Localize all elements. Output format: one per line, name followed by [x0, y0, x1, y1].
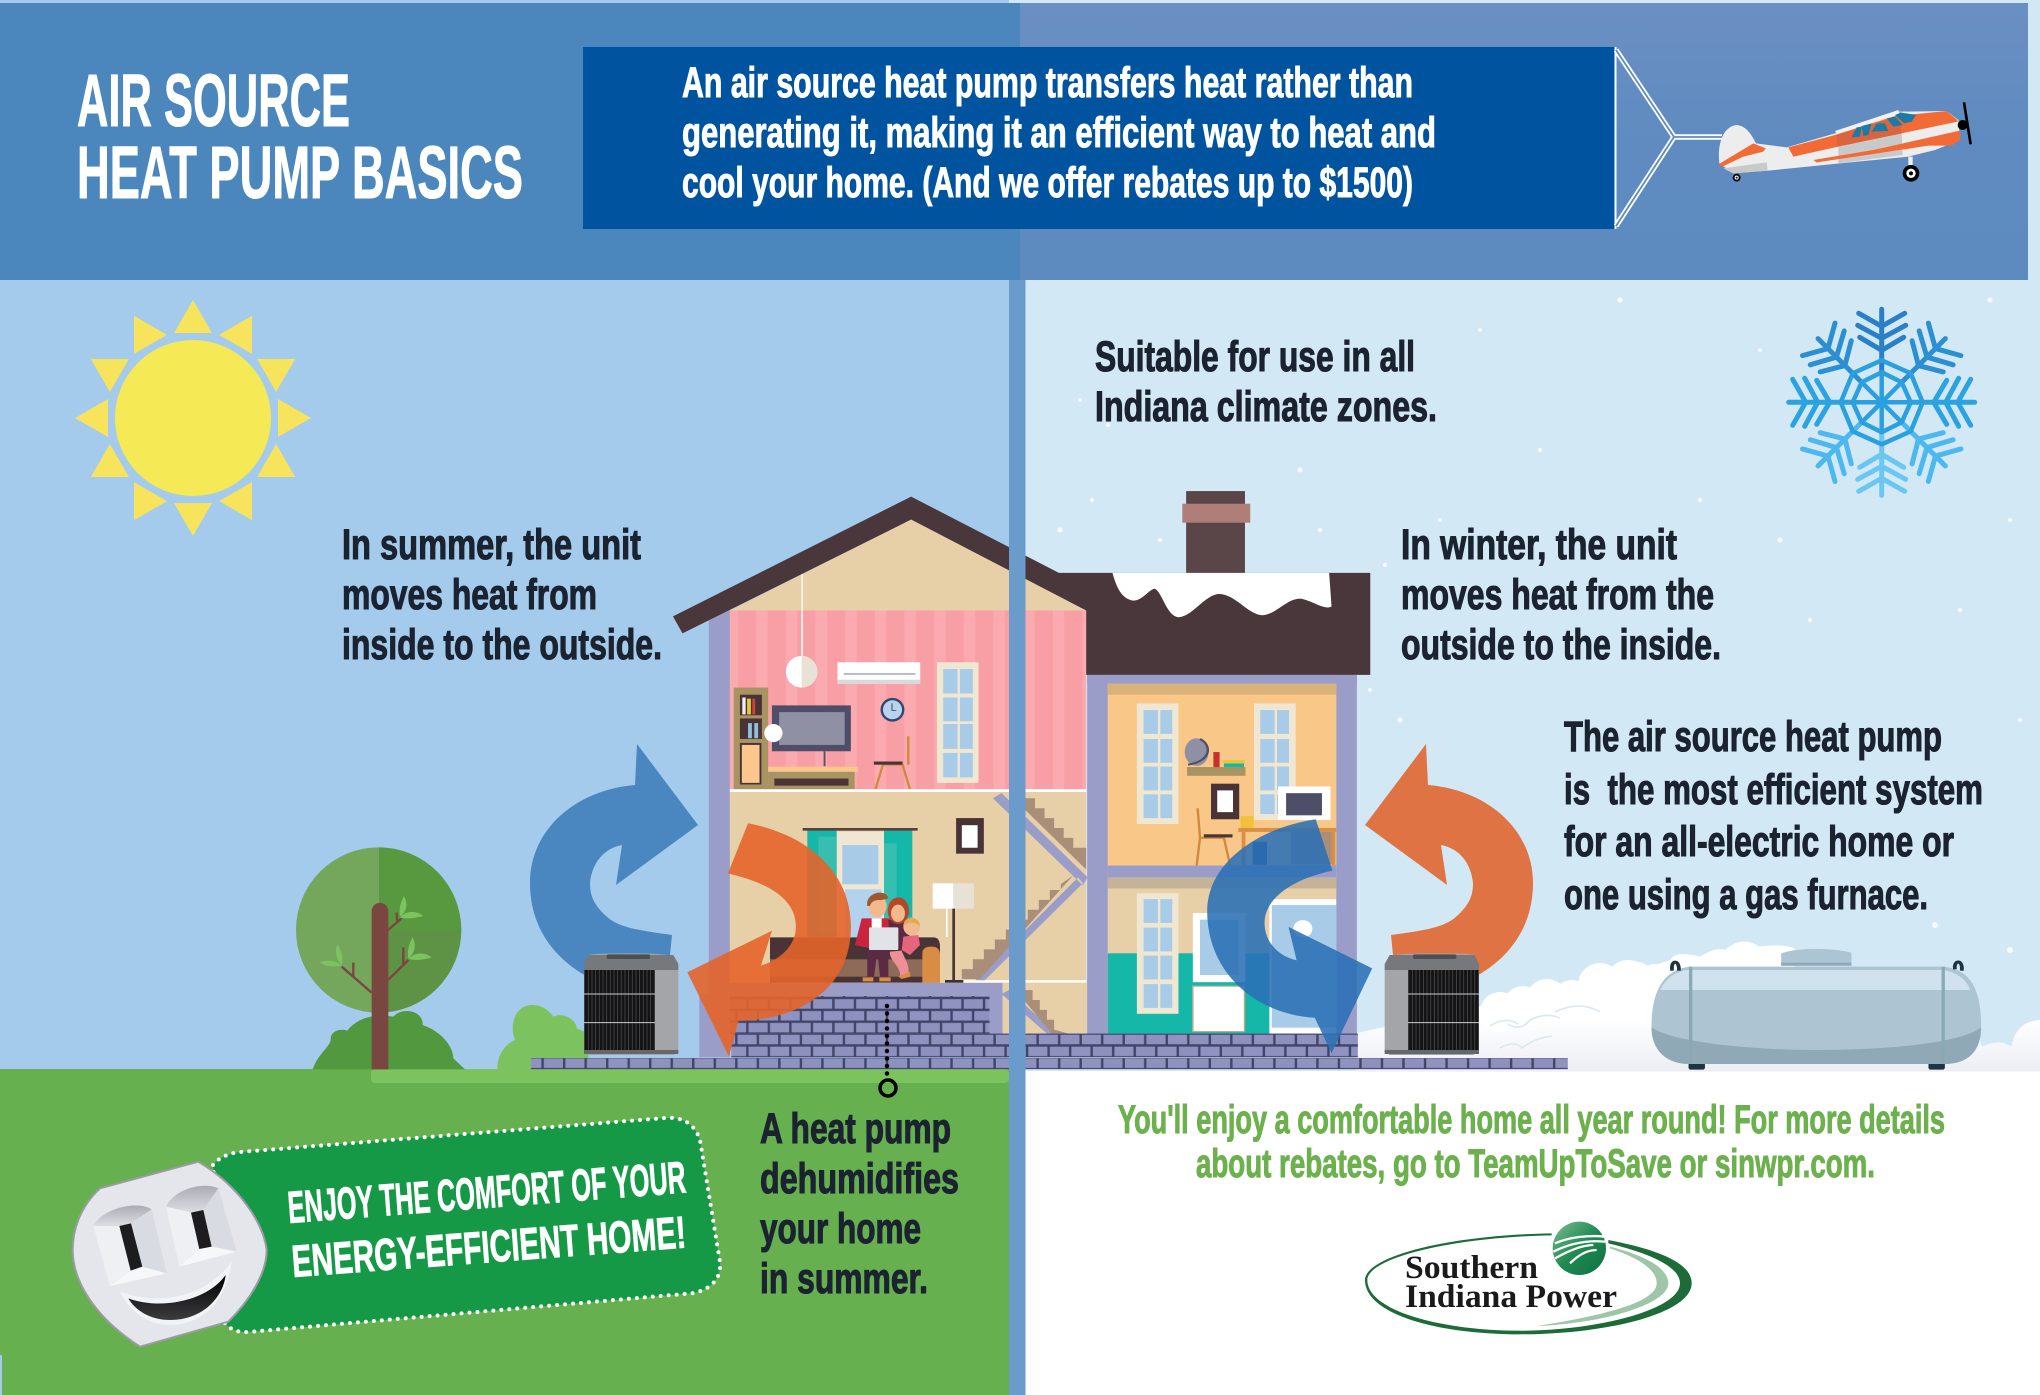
- banner: [583, 47, 1615, 229]
- icon: airplane: [1719, 102, 1971, 182]
- text: dehumidifies: dehumidifies: [760, 1155, 959, 1203]
- family: [855, 893, 920, 981]
- window: [837, 832, 884, 938]
- text: dehumidifies: in summer.: [760, 1255, 928, 1303]
- icon: snow cloud: [1355, 942, 2040, 1072]
- icon: tree: [296, 847, 465, 1069]
- text: summer operation: [342, 521, 662, 669]
- house cutaway: [531, 491, 1568, 1069]
- text: winter operation: [1401, 521, 1721, 669]
- roof: [673, 497, 1370, 675]
- center divider: [1009, 280, 1026, 1395]
- badge: enjoy the comfort: ENERGY-EFFICIENT HOME!: [290, 1206, 688, 1287]
- lower room left: [730, 789, 1088, 1034]
- text: closing message: [1118, 1098, 1945, 1186]
- text: summer operation: inside to the outside.: [342, 621, 662, 669]
- badge: enjoy the comfort: ENJOY THE COMFORT OF YOUR: [286, 1152, 688, 1233]
- banner: An air source heat pump transfers heat rather than: [682, 59, 1413, 107]
- text: most efficient system: [1564, 713, 1983, 919]
- icon: smiling outlet: [73, 1162, 267, 1347]
- icon: bush: [497, 1005, 588, 1069]
- upper room left: [730, 573, 1086, 792]
- title: AIR SOURCE: [77, 59, 350, 142]
- icon: sun: [75, 300, 311, 536]
- snow speckles: [1058, 298, 2022, 953]
- right house upper room: [1108, 684, 1336, 866]
- icon: propane tank: [1651, 949, 1981, 1070]
- sofa: [770, 937, 940, 983]
- living room: curtains, window, lamp, sofa and family: [770, 828, 974, 983]
- snow on roof: [1112, 573, 1332, 617]
- text: dehumidifies: [760, 1105, 959, 1303]
- curtain rod: [803, 828, 918, 831]
- logo: Southern Indiana Power: Indiana Power: [1405, 1279, 1617, 1315]
- icon: outdoor heat pump unit right: [1385, 953, 1479, 1055]
- arrow: winter exterior orange: [1365, 744, 1533, 978]
- curtains: [807, 830, 912, 937]
- text: dehumidifies: your home: [760, 1205, 921, 1253]
- text: winter operation: moves heat from the: [1401, 571, 1714, 619]
- text: suitable climate zones: Suitable for use in all: [1095, 333, 1415, 381]
- banner: generating it, making it an efficient way to heat and: [682, 109, 1436, 157]
- text: winter operation: In winter, the unit: [1401, 521, 1677, 569]
- badge: enjoy the comfort: [213, 1118, 720, 1332]
- floor lamp: [933, 883, 974, 983]
- arrow: winter interior blue: [1207, 819, 1372, 1053]
- logo: Southern Indiana Power: Southern: [1405, 1250, 1538, 1286]
- left wall: [699, 607, 730, 1057]
- text: suitable climate zones: Indiana climate zones.: [1095, 383, 1437, 431]
- text: summer operation: In summer, the unit: [342, 521, 641, 569]
- arrow: summer exterior blue: [530, 744, 698, 978]
- icon: snowflake: [1789, 309, 1975, 495]
- banner tow lines: [1614, 47, 1722, 229]
- icon: outdoor heat pump unit left: [584, 953, 678, 1055]
- text: suitable climate zones: [1095, 333, 1437, 431]
- text: dehumidifies: A heat pump: [760, 1105, 951, 1153]
- attic gable: [730, 520, 1086, 610]
- right house walls and lower stairs: [1002, 675, 1357, 1035]
- text: summer operation: moves heat from: [342, 571, 597, 619]
- arrow: summer interior orange: [687, 823, 851, 1057]
- text: winter operation: outside to the inside.: [1401, 621, 1721, 669]
- logo: Southern Indiana Power: [1365, 1222, 1692, 1334]
- dotted callout line: [880, 1006, 896, 1096]
- title: HEAT PUMP BASICS: [77, 131, 523, 214]
- banner: cool your home. (And we offer rebates up to $1500): [682, 159, 1413, 207]
- right house lower room: [1108, 877, 1336, 1034]
- foundation: [531, 983, 1568, 1069]
- title: [77, 59, 523, 214]
- header band: [0, 3, 2028, 280]
- chimney: [1182, 491, 1250, 574]
